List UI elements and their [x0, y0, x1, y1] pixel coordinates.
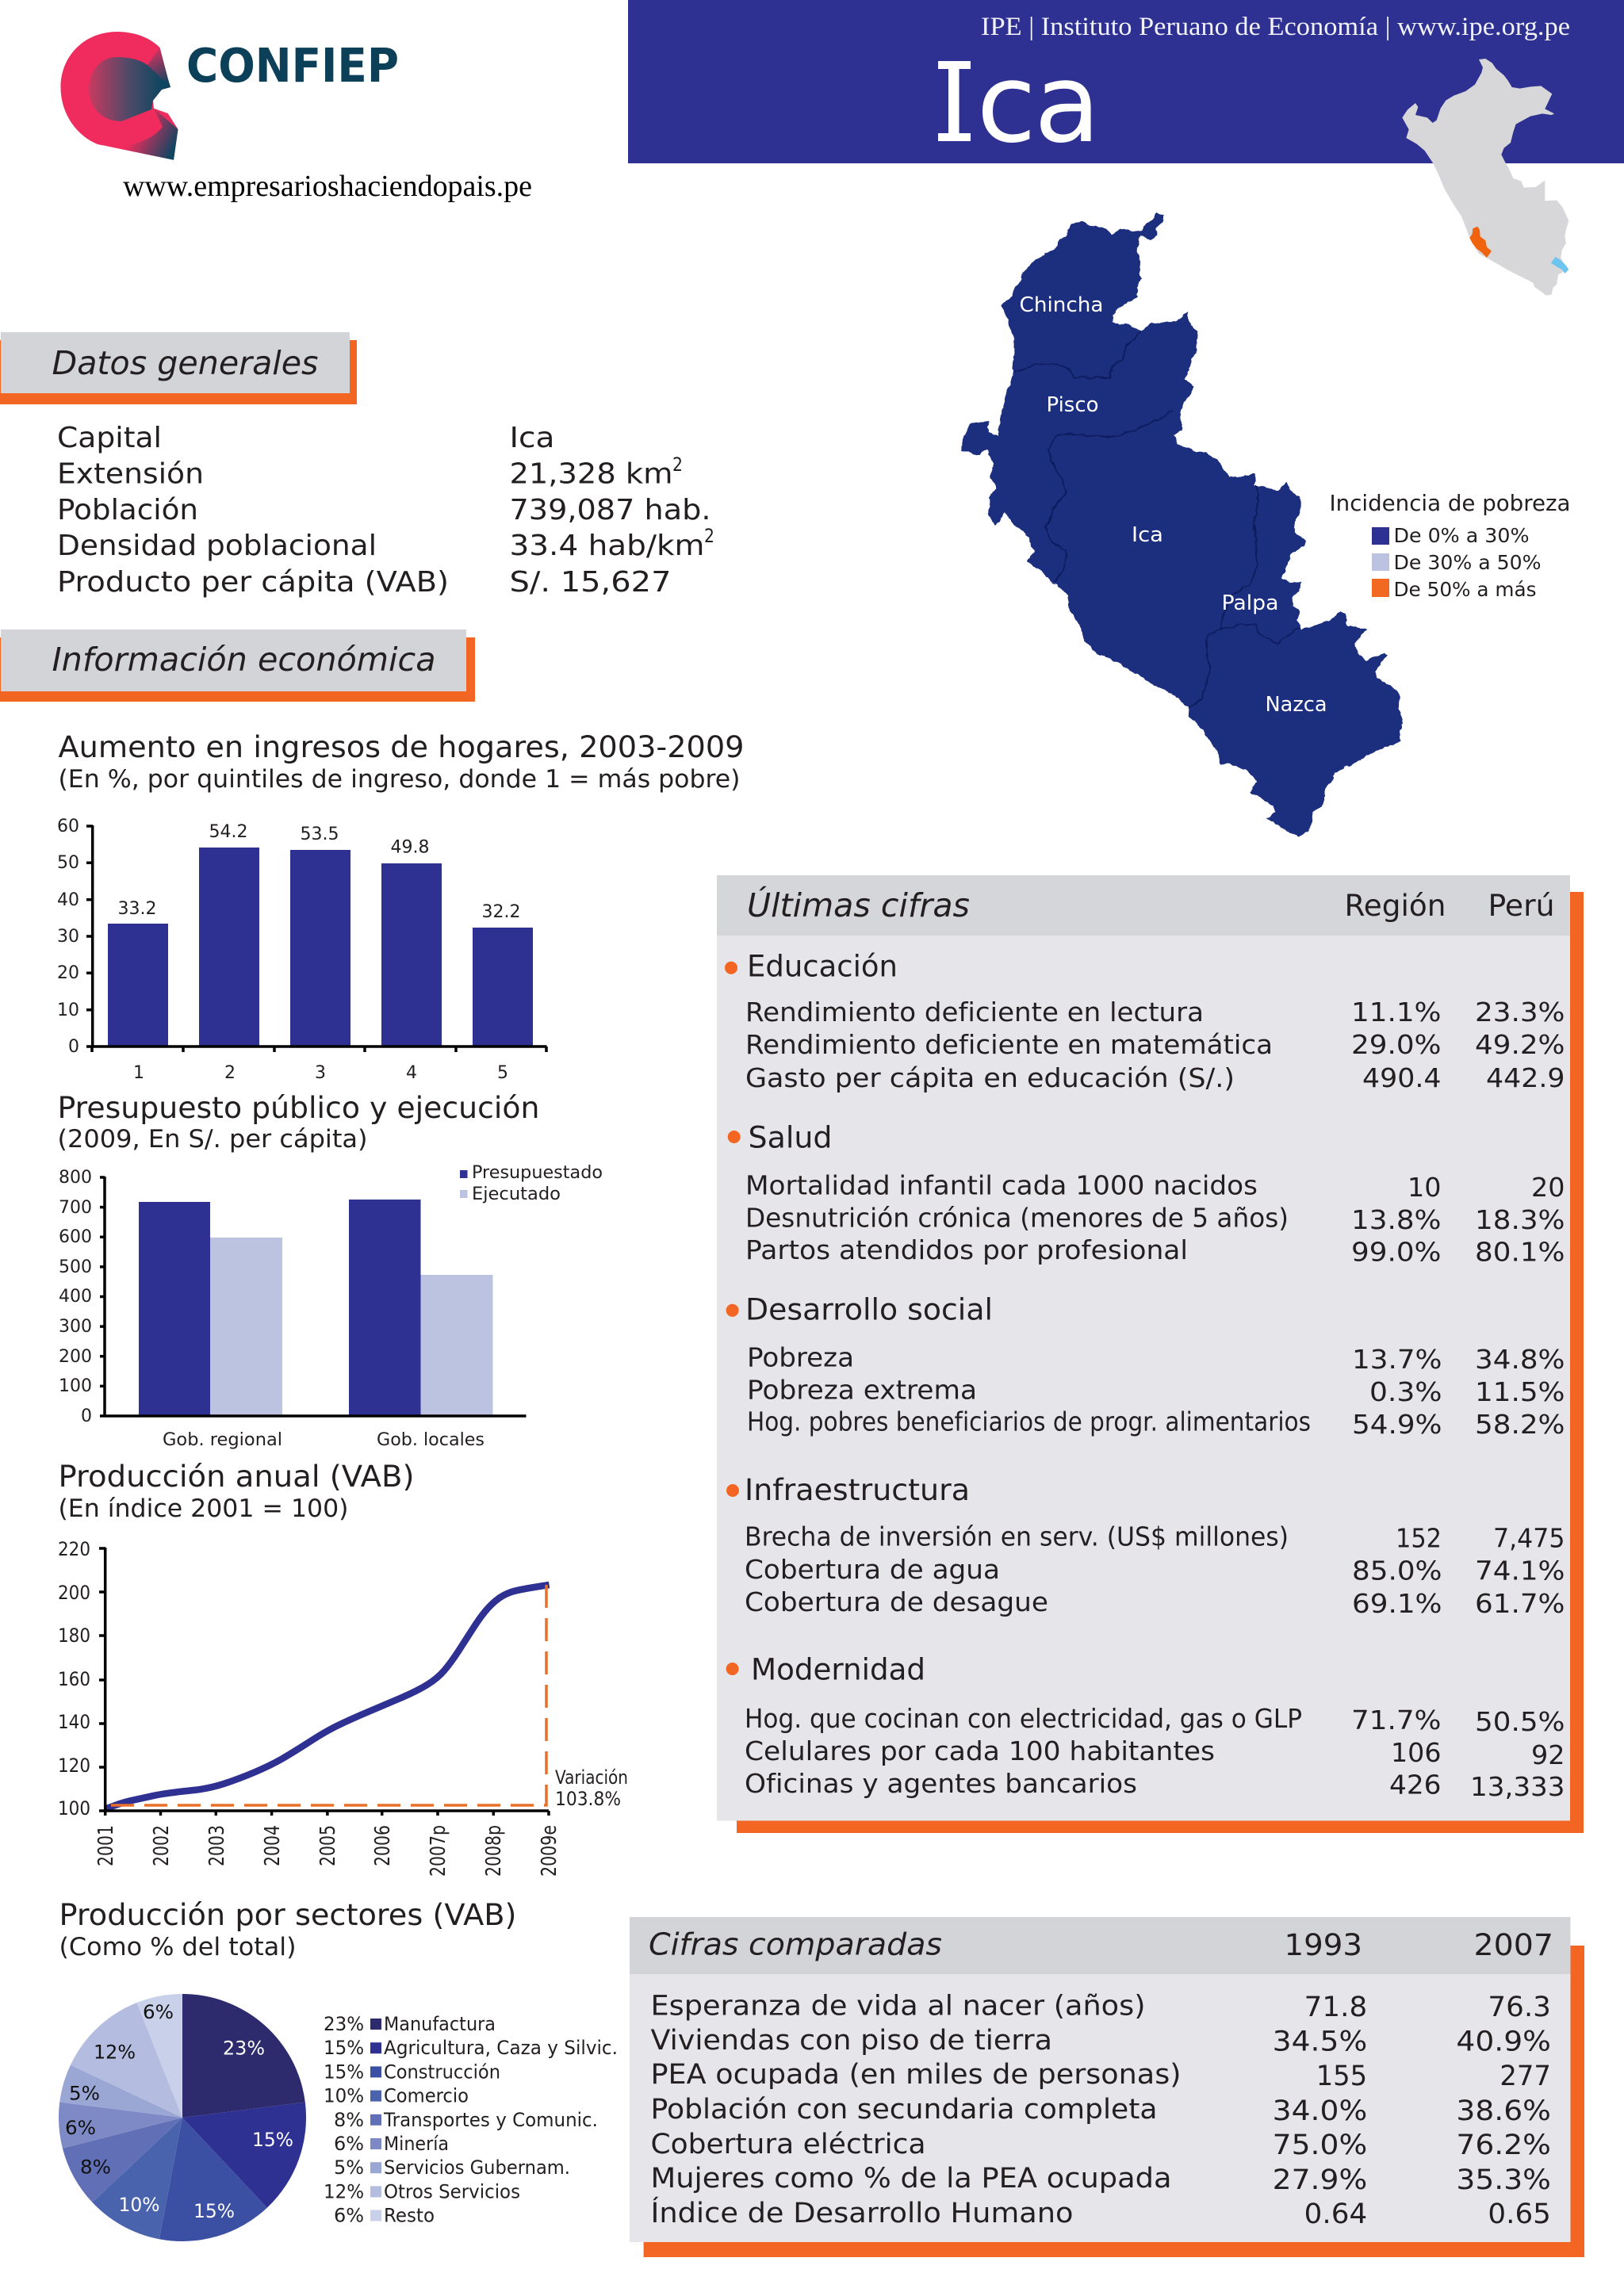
- bar chart: presupuesto y ejecución: [59, 1163, 603, 1450]
- line chart: producción anual: 200: [58, 1582, 90, 1604]
- line chart: producción anual: 2008p: [482, 1825, 506, 1877]
- table rows: Mujeres como % de la PEA ocupada: [650, 2163, 1172, 2195]
- section: Salud: Salud: [749, 1121, 833, 1155]
- section: Educación: Rendimiento deficiente en lectura: [745, 997, 1204, 1027]
- section: Desarrollo social: Pobreza extrema: [747, 1375, 977, 1406]
- table rows: 27.9%: [1273, 2164, 1367, 2196]
- bar chart: ingresos por quintil: 32.2: [482, 902, 520, 922]
- pie chart: sectores: 12%: [94, 2041, 136, 2063]
- bar chart: presupuesto y ejecución: 500: [59, 1257, 92, 1277]
- section: Infraestructura: 85.0%: [1352, 1556, 1442, 1586]
- panel: datos generales table: Densidad poblacional: [57, 530, 377, 562]
- pie chart: sectores: 6%: [143, 2001, 174, 2023]
- bar chart: ingresos por quintil: 1: [133, 1063, 144, 1083]
- line chart: producción anual: 2004: [261, 1825, 285, 1866]
- table header: Perú: [1488, 889, 1554, 923]
- section: Educación: 49.2%: [1475, 1029, 1565, 1060]
- bar chart: presupuesto y ejecución: Gob. regional: [163, 1430, 282, 1450]
- bar chart: ingresos por quintil: 2: [224, 1063, 236, 1083]
- table rows: 35.3%: [1456, 2164, 1551, 2196]
- pie legend: sectores: 5%: [334, 2156, 364, 2179]
- header source line: IPE | Instituto Peruano de Economía | www.ipe.org.pe: [981, 13, 1570, 41]
- bar chart: ingresos por quintil: 54.2: [209, 822, 247, 842]
- pie legend: sectores: Agricultura, Caza y Silvic.: [384, 2037, 618, 2059]
- bar chart: ingresos por quintil: 30: [57, 927, 79, 947]
- table header: 1993: [1285, 1928, 1362, 1962]
- bar chart: presupuesto y ejecución: Gob. locales: [377, 1430, 485, 1450]
- pie chart: sectores: 15%: [252, 2129, 293, 2151]
- bar chart: ingresos por quintil: 4: [406, 1063, 417, 1083]
- line chart: producción anual: 120: [58, 1755, 90, 1777]
- pie legend: sectores: Resto: [384, 2204, 435, 2226]
- table rows: 76.3: [1488, 1992, 1551, 2023]
- panel: datos generales table: S/. 15,627: [509, 566, 671, 599]
- province label: Chincha: Chincha: [1020, 293, 1104, 317]
- line chart: producción anual: 180: [58, 1624, 90, 1647]
- section: Infraestructura: Cobertura de desague: [745, 1586, 1048, 1617]
- pie legend: sectores: 12%: [324, 2180, 364, 2202]
- callout: variación: [555, 1766, 628, 1810]
- table rows: 40.9%: [1456, 2026, 1551, 2058]
- pie chart: sectores: 23%: [223, 2038, 265, 2060]
- legend: presupuesto: Ejecutado: [472, 1184, 561, 1204]
- bar chart: ingresos por quintil: 10: [57, 1001, 79, 1020]
- province label: Palpa: Palpa: [1221, 591, 1278, 615]
- section: Modernidad: 106: [1391, 1737, 1442, 1768]
- table rows: 75.0%: [1273, 2130, 1367, 2161]
- province label: Pisco: Pisco: [1047, 393, 1099, 417]
- table rows: Índice de Desarrollo Humano: [650, 2196, 1074, 2229]
- pie legend: sectores: 8%: [334, 2109, 364, 2131]
- section: Salud: Desnutrición crónica (menores de 5 años): [745, 1203, 1289, 1234]
- section: Desarrollo social: 0.3%: [1369, 1376, 1442, 1407]
- province label: Ica: Ica: [1132, 523, 1163, 547]
- bar chart: ingresos por quintil: 50: [57, 853, 79, 873]
- chart heading: Producción anual: (En índice 2001 = 100): [59, 1494, 349, 1523]
- section: Desarrollo social: Hog. pobres beneficiarios de progr. alimentarios: [747, 1406, 1311, 1437]
- section: Desarrollo social: 13.7%: [1352, 1344, 1442, 1375]
- section: Educación: 29.0%: [1351, 1029, 1442, 1060]
- pie chart: sectores: 8%: [80, 2156, 111, 2179]
- table rows: 34.5%: [1273, 2026, 1367, 2058]
- section: Infraestructura: Cobertura de agua: [745, 1554, 1000, 1585]
- bar chart: ingresos por quintil: 49.8: [391, 837, 429, 858]
- bar chart: presupuesto y ejecución: 700: [59, 1198, 92, 1218]
- panel heading: Datos generales: [0, 332, 357, 404]
- panel: datos generales table: Ica: [509, 422, 555, 454]
- section: Desarrollo social: 58.2%: [1475, 1409, 1565, 1440]
- pie legend: sectores: 15%: [324, 2061, 364, 2083]
- section: Salud: 80.1%: [1475, 1237, 1565, 1267]
- table rows: Viviendas con piso de tierra: [650, 2025, 1052, 2057]
- bar chart: presupuesto y ejecución: 200: [59, 1347, 92, 1367]
- panel: datos generales table: 21,328 km: [509, 458, 672, 490]
- section: Salud: 18.3%: [1475, 1204, 1565, 1235]
- section: Educación: 442.9: [1486, 1062, 1565, 1093]
- section: Salud: [728, 1121, 1565, 1267]
- province label: Nazca: Nazca: [1266, 693, 1327, 717]
- section: Modernidad: Celulares por cada 100 habitantes: [745, 1735, 1215, 1766]
- pie legend: sectores: Otros Servicios: [384, 2180, 520, 2202]
- section: Educación: Gasto per cápita en educación (S/.): [745, 1062, 1235, 1093]
- line chart: producción anual: 100: [58, 1797, 90, 1820]
- panel heading: Información económica: Información económica: [52, 641, 436, 679]
- section: Modernidad: [726, 1652, 1565, 1802]
- region title: Ica: [938, 41, 1101, 167]
- section: Educación: Rendimiento deficiente en matemática: [745, 1029, 1273, 1060]
- panel: datos generales table: 739,087 hab.: [509, 494, 710, 526]
- legend: presupuesto: Presupuestado: [472, 1163, 603, 1183]
- bar chart: presupuesto y ejecución: 800: [59, 1168, 92, 1188]
- section: Infraestructura: 61.7%: [1475, 1588, 1565, 1619]
- section: Infraestructura: 7,475: [1493, 1522, 1565, 1554]
- panel: datos generales table: Extensión: [57, 458, 204, 490]
- section: Desarrollo social: [726, 1293, 1565, 1440]
- table rows: 155: [1316, 2061, 1367, 2092]
- section: Modernidad: 13,333: [1470, 1771, 1565, 1802]
- table rows: PEA ocupada (en miles de personas): [650, 2059, 1182, 2091]
- map legend: Incidencia de pobreza: [1329, 490, 1570, 516]
- callout: variación: Variación: [555, 1766, 628, 1789]
- line chart: producción anual: 2001: [94, 1825, 118, 1866]
- chart heading: Aumento en ingresos: [59, 730, 744, 794]
- chart heading: Producción por sectores: (Como % del total): [59, 1933, 297, 1961]
- bar chart: ingresos por quintil: 53.5: [301, 825, 339, 844]
- chart heading: Producción anual: Producción anual (VAB): [59, 1460, 414, 1494]
- table header: Región: [1345, 889, 1446, 923]
- bar chart: ingresos por quintil: 3: [315, 1063, 326, 1083]
- pie chart: sectores: 6%: [65, 2117, 96, 2139]
- logo wordmark: CONFIEP: [186, 38, 399, 93]
- callout: variación: 103.8%: [555, 1788, 621, 1810]
- table header: Últimas cifras: [747, 886, 970, 924]
- pie chart: sectores: 5%: [69, 2082, 100, 2104]
- chart heading: Presupuesto: Presupuesto público y ejecución: [57, 1091, 539, 1125]
- section: Educación: 23.3%: [1475, 997, 1565, 1027]
- chart heading: Presupuesto: [57, 1091, 539, 1154]
- table rows: 277: [1500, 2061, 1551, 2092]
- table header: 2007: [1473, 1928, 1553, 1962]
- chart heading: Aumento en ingresos: (En %, por quintiles de ingreso, donde 1 = más pobre): [59, 765, 740, 794]
- map legend: De 30% a 50%: [1394, 551, 1542, 574]
- logo: CONFIEP: [60, 32, 399, 160]
- section: Modernidad: 71.7%: [1351, 1705, 1442, 1735]
- panel: datos generales table: [57, 422, 714, 599]
- section: Salud: Mortalidad infantil cada 1000 nacidos: [745, 1170, 1258, 1201]
- section: Infraestructura: 69.1%: [1352, 1588, 1442, 1619]
- region map: Ica provinces: [962, 213, 1404, 837]
- line chart: producción anual: 2003: [205, 1825, 229, 1866]
- panel: datos generales table: 33.4 hab/km: [509, 530, 704, 562]
- table rows: Población con secundaria completa: [650, 2094, 1158, 2126]
- panel: datos generales table: 2: [672, 453, 683, 476]
- section: Salud: 13.8%: [1351, 1204, 1442, 1235]
- line chart: producción anual: 160: [58, 1668, 90, 1690]
- panel: datos generales table: 2: [704, 525, 714, 547]
- pie chart: sectores: 10%: [119, 2194, 160, 2216]
- locator map: Peru: [1402, 59, 1568, 296]
- bar chart: presupuesto y ejecución: 100: [59, 1376, 92, 1396]
- table rows: 71.8: [1304, 1992, 1367, 2023]
- section: Desarrollo social: 54.9%: [1352, 1409, 1442, 1440]
- header band: [628, 0, 1624, 167]
- pie legend: sectores: 6%: [334, 2204, 364, 2226]
- bar chart: presupuesto y ejecución: 300: [59, 1317, 92, 1337]
- table rows: 38.6%: [1456, 2095, 1551, 2127]
- line chart: producción anual: 140: [58, 1711, 90, 1733]
- section: Modernidad: 426: [1389, 1770, 1442, 1800]
- section: Infraestructura: 74.1%: [1475, 1556, 1565, 1586]
- section: Infraestructura: [726, 1473, 1565, 1619]
- website url: www.empresarioshaciendopais.pe: [123, 170, 532, 203]
- section: Modernidad: 92: [1531, 1739, 1565, 1770]
- pie legend: sectores: 10%: [324, 2085, 364, 2107]
- chart heading: Presupuesto: (2009, En S/. per cápita): [57, 1125, 368, 1154]
- line chart: producción anual: 2005: [316, 1825, 340, 1866]
- pie legend: sectores: [324, 2013, 618, 2226]
- line chart: producción anual: 220: [58, 1538, 90, 1560]
- pie legend: sectores: Transportes y Comunic.: [383, 2109, 598, 2131]
- section: Desarrollo social: Desarrollo social: [745, 1293, 993, 1327]
- table rows: Cobertura eléctrica: [650, 2129, 926, 2160]
- table rows: 76.2%: [1456, 2130, 1551, 2161]
- section: Modernidad: Oficinas y agentes bancarios: [745, 1768, 1137, 1799]
- table rows: [650, 1991, 1551, 2230]
- table header: [747, 886, 1554, 924]
- bar chart: ingresos por quintil: 33.2: [118, 899, 156, 919]
- section: Salud: 10: [1408, 1172, 1442, 1203]
- panel heading: Datos generales: Datos generales: [52, 344, 319, 382]
- section: Educación: 490.4: [1362, 1062, 1442, 1093]
- line chart: producción anual: 2007p: [427, 1825, 450, 1877]
- section: Salud: 99.0%: [1351, 1237, 1442, 1267]
- bar chart: presupuesto y ejecución: 400: [59, 1287, 92, 1307]
- pie legend: sectores: Manufactura: [384, 2013, 496, 2035]
- section: Modernidad: 50.5%: [1475, 1706, 1565, 1737]
- section: Modernidad: Modernidad: [751, 1652, 925, 1687]
- section: Educación: 11.1%: [1351, 997, 1442, 1027]
- section: Salud: 20: [1531, 1172, 1565, 1203]
- section: Infraestructura: 152: [1396, 1522, 1442, 1554]
- bar chart: ingresos por quintil: 0: [68, 1037, 79, 1057]
- bar chart: ingresos por quintil: 40: [57, 890, 79, 910]
- line chart: producción anual: [58, 1538, 628, 1877]
- pie legend: sectores: Servicios Gubernam.: [384, 2156, 570, 2179]
- pie legend: sectores: 6%: [334, 2133, 364, 2155]
- chart heading: Producción por sectores: Producción por sectores (VAB): [59, 1898, 517, 1932]
- section: Salud: Partos atendidos por profesional: [745, 1234, 1188, 1265]
- panel: datos generales table: Producto per cápita (VAB): [57, 566, 449, 599]
- bar chart: presupuesto y ejecución: 600: [59, 1227, 92, 1247]
- chart heading: Aumento en ingresos: Aumento en ingresos de hogares, 2003-2009: [59, 730, 744, 764]
- section: Modernidad: Hog. que cocinan con electricidad, gas o GLP: [745, 1703, 1302, 1734]
- map legend: De 0% a 30%: [1394, 524, 1529, 547]
- bar chart: presupuesto y ejecución: 0: [81, 1406, 92, 1426]
- section: Educación: [725, 950, 1565, 1093]
- map legend: De 50% a más: [1394, 578, 1537, 601]
- pie legend: sectores: Comercio: [384, 2085, 469, 2107]
- bar chart: ingresos por quintil: [57, 817, 547, 1083]
- bar chart: ingresos por quintil: 5: [497, 1063, 508, 1083]
- pie legend: sectores: 15%: [324, 2037, 364, 2059]
- panel heading: Información económica: [0, 629, 475, 702]
- table rows: 0.64: [1304, 2198, 1367, 2230]
- table rows: Esperanza de vida al nacer (años): [650, 1991, 1145, 2022]
- panel: datos generales table: Población: [57, 494, 198, 526]
- section: Educación: Educación: [747, 950, 898, 984]
- table header: [649, 1927, 1553, 1962]
- panel: Cifras comparadas: [630, 1917, 1584, 2257]
- table rows: 0.65: [1488, 2198, 1551, 2230]
- bar chart: ingresos por quintil: 60: [57, 817, 79, 836]
- pie legend: sectores: Minería: [384, 2133, 449, 2155]
- line chart: producción anual: 2002: [150, 1825, 174, 1866]
- legend: presupuesto: [460, 1163, 603, 1204]
- bar chart: ingresos por quintil: 20: [57, 963, 79, 983]
- line chart: producción anual: 2006: [371, 1825, 395, 1866]
- chart heading: Producción anual: [59, 1460, 414, 1523]
- panel: datos generales table: Capital: [57, 422, 162, 454]
- pie legend: sectores: Construcción: [384, 2061, 500, 2083]
- section: Infraestructura: Infraestructura: [745, 1473, 970, 1507]
- section: Desarrollo social: 11.5%: [1475, 1376, 1565, 1407]
- pie chart: sectores: 15%: [193, 2200, 235, 2222]
- table header: Cifras comparadas: [649, 1927, 942, 1962]
- chart heading: Producción por sectores: [59, 1898, 517, 1961]
- table rows: 34.0%: [1273, 2095, 1367, 2127]
- section: Desarrollo social: 34.8%: [1475, 1344, 1565, 1375]
- pie chart: sectores: [59, 1994, 306, 2241]
- section: Desarrollo social: Pobreza: [747, 1341, 854, 1373]
- map legend: [1329, 490, 1570, 601]
- line chart: producción anual: 2009e: [538, 1825, 561, 1877]
- pie legend: sectores: 23%: [324, 2013, 364, 2035]
- section: Infraestructura: Brecha de inversión en serv. (US$ millones): [745, 1521, 1289, 1552]
- panel: Últimas cifras: [717, 875, 1584, 1833]
